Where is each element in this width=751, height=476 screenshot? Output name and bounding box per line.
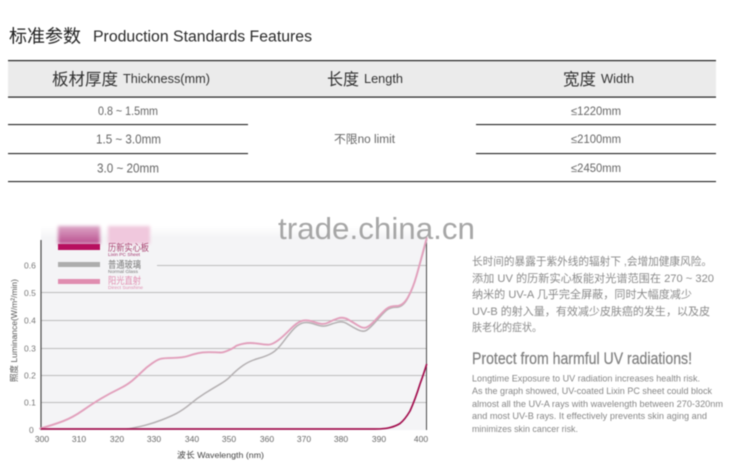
- text block: English description: As the graph showed, UV-coated Lixin PC sheet could block: [472, 386, 712, 396]
- thickness values: 1.5 ~ 3.0mm: [96, 132, 161, 146]
- x axis tick labels: [35, 434, 428, 444]
- x axis tick labels: 320: [110, 434, 124, 444]
- width values: ≤2100mm: [571, 134, 621, 146]
- y axis tick labels: 0.6: [24, 260, 36, 270]
- width values: [571, 106, 621, 175]
- x axis tick labels: 330: [147, 434, 161, 444]
- text block: Chinese description: 肤老化的症状。: [472, 320, 542, 334]
- y axis title: 照度 Luminance(W/m²/min): [9, 279, 19, 382]
- chart legend: 普通玻璃: [108, 259, 141, 271]
- table header band: Width: [601, 71, 634, 86]
- table header band: 板材厚度: [52, 70, 118, 89]
- title: Production Standards Features: [93, 28, 312, 46]
- chart legend: 阳光直射: [108, 275, 141, 287]
- heading: protect from UV: Protect from harmful UV radiations!: [472, 349, 692, 368]
- text block: Chinese description: 纳米的 UV-A 几乎完全屏蔽，同时大幅度减少: [472, 287, 692, 301]
- x axis tick labels: 300: [35, 434, 49, 444]
- text block: Chinese description: UV-B 的射入量，有效减少皮肤癌的发生，以及皮: [472, 304, 710, 318]
- table header band: [8, 60, 716, 98]
- axes: [41, 240, 426, 430]
- table header band: 宽度: [563, 70, 596, 89]
- x axis tick labels: 310: [72, 434, 86, 444]
- chart legend: Direct Sunshine: [108, 285, 144, 290]
- table header band: 长度: [327, 70, 359, 89]
- text block: English description: Longtime Exposure to UV radiation increases health risk.: [472, 374, 700, 384]
- chart legend: Lixin PC Sheet: [108, 252, 141, 257]
- width values: ≤1220mm: [571, 106, 621, 118]
- x axis tick labels: 360: [260, 434, 274, 444]
- length value: 不限no limit: [334, 133, 396, 146]
- thickness values: 0.8 ~ 1.5mm: [98, 106, 158, 118]
- chart legend: 历新实心板: [108, 242, 149, 254]
- table header band: Length: [364, 71, 403, 86]
- curve: direct sunshine: [40, 238, 427, 428]
- text block: English description: almost all the UV-A rays with wavelength between 270-320nm: [472, 399, 723, 409]
- panel: specification table: [8, 60, 716, 182]
- curve: normal glass: [127, 240, 427, 429]
- y axis tick labels: 0.4: [24, 316, 36, 326]
- text block: English description: [472, 374, 723, 434]
- y axis tick labels: 0.2: [24, 370, 36, 380]
- title: [9, 26, 312, 46]
- y axis tick labels: 0.1: [24, 398, 36, 408]
- chart legend: [58, 226, 150, 290]
- curve: Lixin PC sheet: [41, 364, 427, 429]
- y axis tick labels: 0: [29, 425, 34, 435]
- x axis tick labels: 350: [222, 434, 236, 444]
- thickness values: 3.0 ~ 20mm: [97, 162, 159, 176]
- x axis tick labels: 400: [414, 434, 428, 444]
- x axis tick labels: 340: [185, 434, 199, 444]
- y axis tick labels: 0.5: [24, 288, 36, 298]
- line chart: UV transmission by wavelength: [9, 226, 428, 460]
- text block: Chinese description: [472, 254, 714, 334]
- title: 标准参数: [9, 26, 81, 46]
- table header band: Thickness(mm): [123, 71, 210, 86]
- chart legend: Normal Glass: [108, 269, 139, 274]
- plot background: [41, 226, 427, 430]
- width values: ≤2450mm: [571, 163, 621, 175]
- x axis tick labels: 370: [297, 434, 311, 444]
- text block: Chinese description: 添加 UV 的历新实心板能对光谱范围在 270 ~ 320: [472, 271, 714, 285]
- x axis tick labels: 380: [334, 434, 348, 444]
- text block: English description: minimizes skin cancer risk.: [472, 424, 578, 434]
- text block: English description: and most UV-B rays. It effectively prevents skin aging and: [472, 411, 707, 421]
- y axis tick labels: 0.3: [24, 344, 36, 354]
- thickness values: [96, 106, 161, 176]
- text block: Chinese description: 长时间的暴露于紫外线的辐射下 ,会增加健康风险。: [472, 254, 712, 268]
- x axis tick labels: 390: [372, 434, 386, 444]
- x axis title: 波长 Wavelength (nm): [177, 450, 264, 460]
- watermark: trade.china.cn: [278, 211, 475, 246]
- y axis tick labels: [24, 260, 36, 435]
